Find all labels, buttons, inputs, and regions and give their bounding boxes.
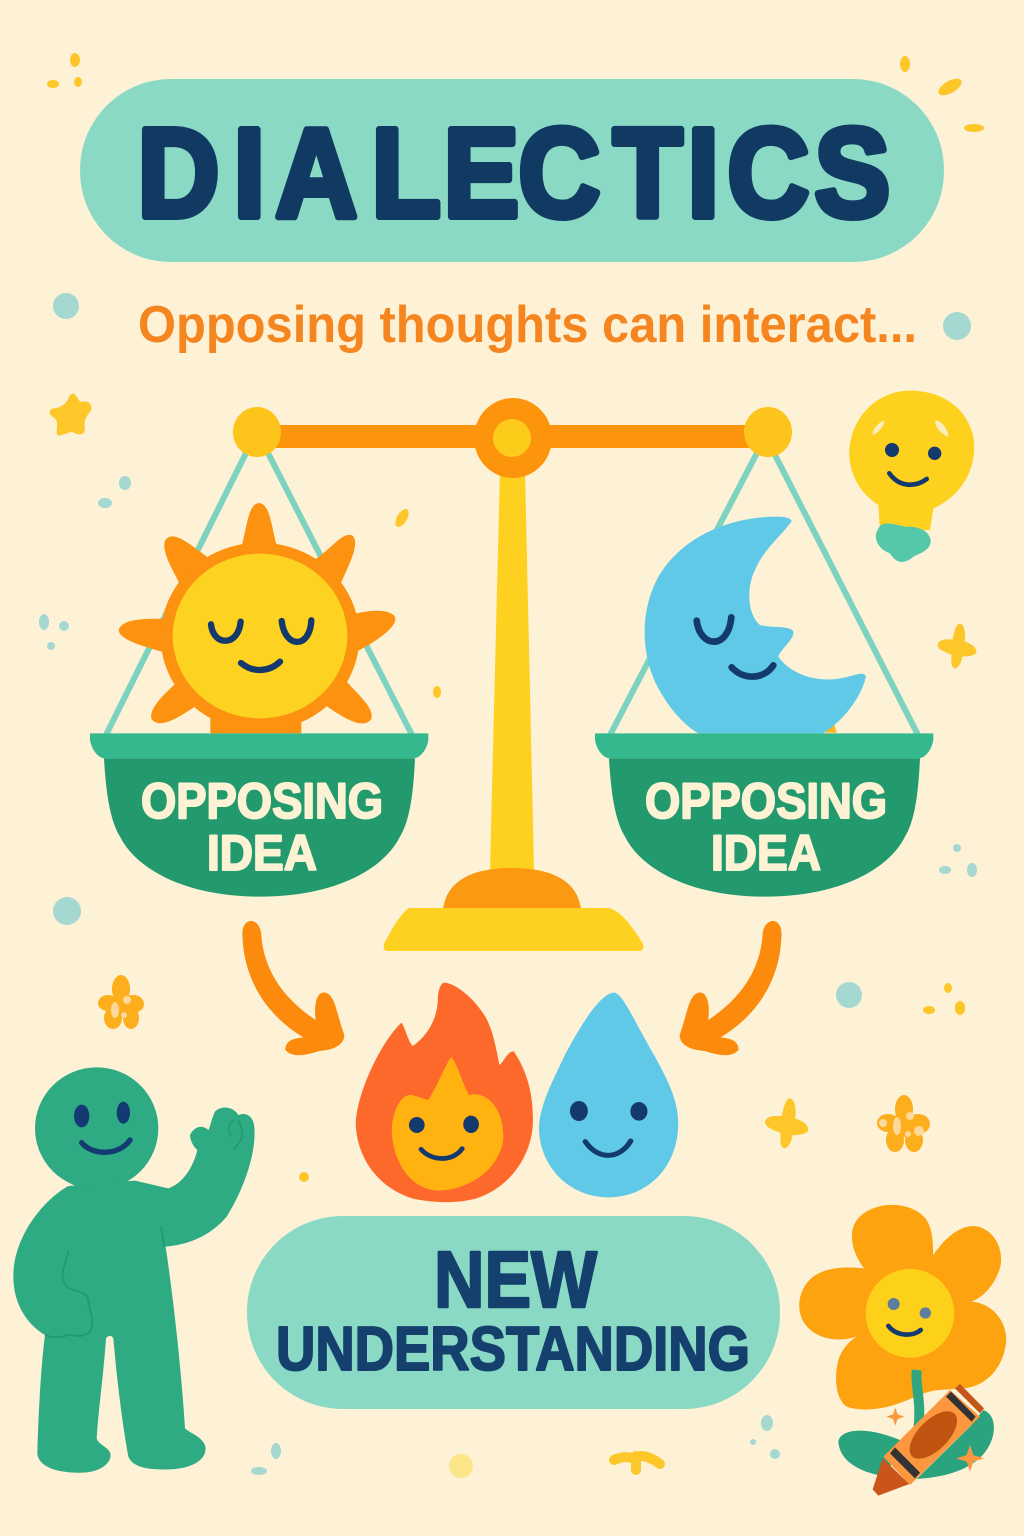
scale beam — [233, 398, 792, 478]
flower face — [866, 1269, 954, 1358]
scale post — [490, 470, 534, 870]
right basket label: OPPOSING — [645, 773, 887, 829]
right basket label: IDEA — [711, 825, 821, 881]
result banner: NEW — [434, 1235, 597, 1324]
icon: green person waving — [13, 1067, 255, 1473]
flower stem and leaves — [838, 1410, 994, 1479]
left basket — [90, 733, 428, 897]
left basket label — [141, 773, 383, 881]
icon: crayon — [873, 1384, 984, 1496]
scale strings — [106, 453, 918, 735]
balance scale — [106, 398, 918, 951]
subtitle: Opposing thoughts can interact... — [138, 296, 917, 354]
right basket — [595, 733, 933, 897]
sun face — [173, 554, 347, 718]
arrow: right idea to result — [680, 921, 782, 1055]
arrow: left idea to result — [242, 921, 344, 1055]
title banner: DIALECTICS — [138, 103, 890, 244]
result banner: UNDERSTANDING — [276, 1315, 750, 1384]
icon: sun — [120, 504, 394, 732]
icon: light bulb — [849, 391, 974, 562]
title banner — [80, 79, 944, 262]
sparkles — [886, 1408, 984, 1472]
scale base — [384, 868, 643, 951]
flower petals — [799, 1205, 1006, 1409]
icon: moon — [645, 517, 866, 733]
result banner — [247, 1216, 780, 1409]
icon: flame character — [356, 983, 533, 1202]
left basket label: OPPOSING — [141, 773, 383, 829]
right basket label — [645, 773, 887, 881]
left basket label: IDEA — [207, 825, 317, 881]
icon: water drop character — [539, 993, 678, 1197]
sun rays — [120, 504, 394, 732]
icon: smiling flower with crayon — [799, 1205, 1006, 1496]
flower stem — [916, 1370, 919, 1430]
